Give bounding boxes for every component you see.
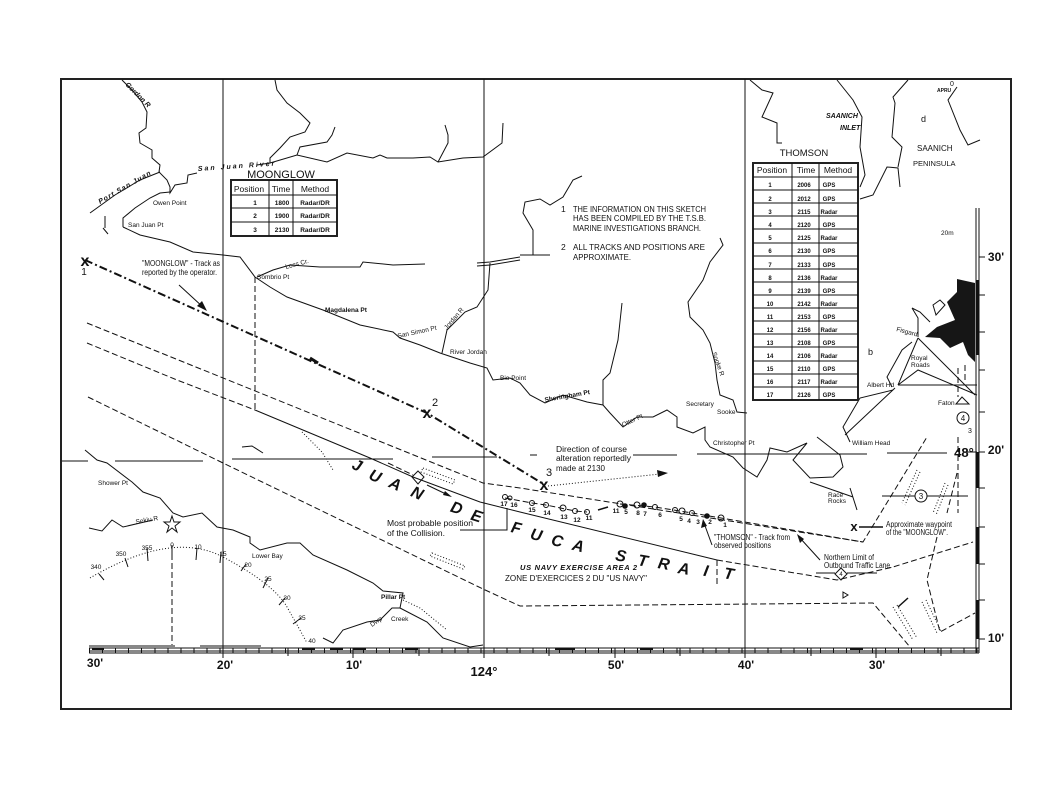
table: MOONGLOW: Position bbox=[234, 184, 264, 194]
waypoint 3 and inbound lanes bbox=[843, 470, 968, 640]
place names: William Head bbox=[852, 440, 891, 447]
track: THOMSON observed positions: 17 bbox=[500, 501, 508, 508]
longitude labels: 10' bbox=[346, 658, 362, 672]
table: THOMSON: GPS bbox=[823, 183, 835, 189]
place names: Pillar Pt bbox=[381, 594, 406, 601]
table: THOMSON: 2117 bbox=[797, 380, 811, 386]
place names: Lower Bay bbox=[252, 553, 283, 560]
table: THOMSON: GPS bbox=[823, 249, 835, 255]
table: THOMSON: Radar bbox=[820, 210, 838, 216]
exercise area label: US NAVY EXERCISE AREA 2 bbox=[520, 563, 638, 572]
strait name: U bbox=[366, 467, 384, 487]
table: MOONGLOW bbox=[231, 169, 337, 236]
table: THOMSON: 2012 bbox=[797, 197, 811, 203]
place names: Dwp bbox=[369, 615, 384, 629]
table: THOMSON: 9 bbox=[768, 289, 772, 295]
strait name: A bbox=[385, 474, 404, 495]
strait name: F bbox=[509, 519, 524, 538]
table: THOMSON: Radar bbox=[820, 276, 838, 282]
place names: River Jordan bbox=[450, 349, 487, 356]
place names: Sooke R bbox=[710, 351, 725, 377]
place names: Otter Pt bbox=[621, 413, 644, 429]
strait name: S bbox=[614, 547, 628, 566]
table: MOONGLOW: Method bbox=[301, 184, 329, 194]
coastline: Vancouver Island bbox=[90, 80, 980, 510]
lane marker 4: 4 bbox=[839, 572, 843, 578]
table: THOMSON: 1 bbox=[768, 183, 772, 189]
compass rose: 15 bbox=[219, 551, 227, 558]
callout: course alteration bbox=[548, 445, 668, 486]
notes block: MARINE INVESTIGATIONS BRANCH. bbox=[573, 223, 701, 233]
table: THOMSON: 13 bbox=[767, 341, 774, 347]
notes block: 1 bbox=[561, 204, 566, 214]
strait name: A bbox=[569, 537, 586, 556]
callout: THOMSON track bbox=[701, 519, 790, 550]
waypoint 3 and inbound lanes: 3 bbox=[919, 492, 924, 501]
table: THOMSON: Time bbox=[797, 165, 816, 175]
place names: San Juan Pt bbox=[128, 222, 164, 229]
exercise area label bbox=[505, 563, 647, 583]
callout: MOONGLOW waypoint: of the "MOONGLOW". bbox=[886, 528, 948, 537]
table: MOONGLOW: MOONGLOW bbox=[247, 169, 316, 181]
callout: MOONGLOW waypoint: x bbox=[850, 519, 858, 534]
table: THOMSON: 5 bbox=[768, 236, 772, 242]
compass rose: 30 bbox=[283, 595, 291, 602]
compass rose: 35 bbox=[298, 615, 306, 622]
callout: MOONGLOW track: reported by the operator. bbox=[142, 268, 217, 277]
table: MOONGLOW: 2130 bbox=[275, 227, 290, 234]
table: MOONGLOW: Radar/DR bbox=[300, 213, 330, 220]
table: MOONGLOW: 3 bbox=[253, 227, 257, 234]
place names: Sekiu R bbox=[135, 515, 159, 526]
table: THOMSON: GPS bbox=[823, 263, 835, 269]
table: THOMSON: Radar bbox=[820, 236, 838, 242]
longitude labels: 20' bbox=[217, 658, 233, 672]
table: THOMSON: 10 bbox=[767, 302, 774, 308]
latitude labels: 48° bbox=[954, 445, 974, 460]
land mass: dark urban area bbox=[925, 279, 975, 362]
latitude labels bbox=[954, 250, 1004, 645]
waypoint 4: 4 bbox=[961, 414, 966, 423]
place names: Race bbox=[828, 492, 844, 499]
longitude labels bbox=[87, 656, 885, 679]
track: THOMSON observed positions bbox=[500, 494, 863, 542]
track: THOMSON observed positions: 3 bbox=[696, 519, 700, 526]
longitude labels: 30' bbox=[869, 658, 885, 672]
table: THOMSON bbox=[753, 148, 858, 400]
callout: outbound traffic lane limit: Outbound Traffic Lane. bbox=[824, 561, 892, 570]
track: THOMSON observed positions: 6 bbox=[658, 512, 662, 519]
table: THOMSON: 7 bbox=[768, 263, 772, 269]
track: THOMSON observed positions: 11 bbox=[613, 508, 620, 515]
collision symbol and ship tracks bbox=[388, 463, 465, 569]
strait name: J bbox=[349, 456, 365, 476]
callout: collision position bbox=[387, 508, 507, 538]
compass rose: 350 bbox=[116, 551, 127, 558]
table: MOONGLOW: 1800 bbox=[275, 200, 290, 207]
table: THOMSON: 2156 bbox=[797, 328, 811, 334]
waypoint 4 bbox=[956, 397, 972, 435]
strait name: R bbox=[657, 555, 671, 574]
table: THOMSON: 2120 bbox=[797, 223, 811, 229]
place names: Shower Pt bbox=[98, 480, 128, 487]
strait name: I bbox=[702, 563, 710, 580]
place names: b bbox=[868, 347, 873, 357]
track: THOMSON observed positions: 11 bbox=[586, 515, 593, 522]
marker: position 2: 2 bbox=[432, 397, 438, 409]
strait name: U bbox=[528, 526, 544, 545]
table: THOMSON: 11 bbox=[767, 315, 774, 321]
track: THOMSON observed positions: 4 bbox=[687, 518, 691, 525]
notes block: HAS BEEN COMPILED BY THE T.S.B. bbox=[573, 213, 706, 223]
place names: Port San Juan bbox=[98, 170, 153, 206]
table: THOMSON: GPS bbox=[823, 341, 835, 347]
place names: Sombrio Pt bbox=[257, 274, 289, 281]
place names: Faton bbox=[938, 400, 955, 407]
place names: Roads bbox=[911, 362, 931, 369]
table: THOMSON: 3 bbox=[768, 210, 772, 216]
strait name: T bbox=[722, 565, 736, 584]
table: THOMSON: 2153 bbox=[797, 315, 811, 321]
table: THOMSON: GPS bbox=[823, 223, 835, 229]
longitude labels: 50' bbox=[608, 658, 624, 672]
waypoint 4: 3 bbox=[968, 428, 972, 435]
table: THOMSON: 14 bbox=[767, 354, 774, 360]
table: MOONGLOW: 1 bbox=[253, 200, 257, 207]
place names: Sooke bbox=[717, 409, 736, 416]
longitude labels: 40' bbox=[738, 658, 754, 672]
place names: Bio Point bbox=[500, 375, 526, 382]
north arrow bbox=[103, 216, 108, 234]
strait name: N bbox=[408, 484, 426, 504]
place names: Albert Hd bbox=[867, 382, 894, 389]
table: THOMSON: 2142 bbox=[797, 302, 811, 308]
table: THOMSON: 2139 bbox=[797, 289, 811, 295]
place names: 0 bbox=[950, 81, 954, 88]
table: THOMSON: 2108 bbox=[797, 341, 811, 347]
place names: Gordon R bbox=[124, 81, 151, 109]
table: THOMSON: Radar bbox=[820, 380, 838, 386]
table: THOMSON: 2126 bbox=[797, 393, 811, 399]
table: THOMSON: Radar bbox=[820, 354, 838, 360]
table: THOMSON: 2115 bbox=[797, 210, 811, 216]
callout: course alteration: Direction of course bbox=[556, 445, 628, 454]
table: MOONGLOW: 2 bbox=[253, 213, 257, 220]
callout: MOONGLOW track bbox=[142, 259, 220, 311]
place names: Jordan R bbox=[443, 306, 466, 331]
strait name bbox=[349, 456, 736, 584]
track: THOMSON observed positions: 5 bbox=[624, 509, 628, 516]
place names: Magdalena Pt bbox=[325, 307, 368, 314]
strait name: A bbox=[676, 560, 691, 579]
place names: Fisgard bbox=[895, 326, 919, 339]
track: THOMSON observed positions: 1 bbox=[723, 522, 727, 529]
compass rose: 20 bbox=[244, 562, 252, 569]
longitude labels: 30' bbox=[87, 656, 103, 670]
compass rose bbox=[90, 516, 316, 645]
table: THOMSON: GPS bbox=[823, 315, 835, 321]
notes block bbox=[561, 204, 706, 262]
compass rose: 25 bbox=[264, 576, 272, 583]
place names: INLET bbox=[840, 125, 861, 132]
exercise area label: ZONE D'EXERCICES 2 DU "US NAVY" bbox=[505, 574, 647, 583]
table: THOMSON: 2130 bbox=[797, 249, 811, 255]
latitude labels: 20' bbox=[988, 443, 1004, 457]
table: THOMSON: GPS bbox=[823, 367, 835, 373]
place names: Secretary bbox=[686, 401, 715, 408]
table: THOMSON: 2133 bbox=[797, 263, 811, 269]
table: THOMSON: GPS bbox=[823, 197, 835, 203]
table: THOMSON: 15 bbox=[767, 367, 774, 373]
place names: PENINSULA bbox=[913, 159, 956, 168]
table: THOMSON: 12 bbox=[767, 328, 774, 334]
latitude labels: 10' bbox=[988, 631, 1004, 645]
table: THOMSON: 16 bbox=[767, 380, 774, 386]
table: MOONGLOW: Radar/DR bbox=[300, 200, 330, 207]
bottom longitude scale bbox=[89, 646, 979, 658]
callout: outbound traffic lane limit: Northern Limit of bbox=[824, 553, 875, 562]
track: THOMSON observed positions: 5 bbox=[679, 516, 683, 523]
table: THOMSON: Position bbox=[757, 165, 787, 175]
place names: Owen Point bbox=[153, 200, 187, 207]
track: THOMSON observed positions: 15 bbox=[528, 507, 536, 514]
notes block: 2 bbox=[561, 242, 566, 252]
compass rose: 10 bbox=[194, 544, 202, 551]
table: THOMSON: Radar bbox=[820, 302, 838, 308]
place names: San Juan River bbox=[198, 161, 277, 173]
table: THOMSON: 4 bbox=[768, 223, 772, 229]
table: THOMSON: Method bbox=[824, 165, 852, 175]
marker: position 3: x bbox=[540, 477, 549, 494]
callout: outbound traffic lane limit bbox=[797, 534, 892, 570]
map frame bbox=[61, 79, 1011, 709]
compass rose: 40 bbox=[308, 638, 316, 645]
callout: collision position: Most probable position bbox=[387, 519, 473, 528]
strait name: T bbox=[636, 552, 650, 571]
place names: Creek bbox=[391, 616, 409, 623]
marker: position 2 bbox=[423, 397, 438, 422]
track: THOMSON observed positions: 16 bbox=[510, 502, 518, 509]
right latitude scale bbox=[976, 208, 985, 653]
place names: APRU bbox=[937, 88, 952, 94]
callout: THOMSON track: observed positions bbox=[714, 541, 771, 550]
place names: SAANICH bbox=[826, 113, 859, 120]
coastline: Olympic Peninsula bbox=[85, 432, 483, 647]
meridians and parallel bbox=[62, 79, 977, 650]
table: THOMSON: 17 bbox=[767, 393, 774, 399]
marker: position 1: x bbox=[81, 253, 90, 270]
track: THOMSON observed positions: 12 bbox=[573, 517, 581, 524]
traffic lane boundaries bbox=[87, 277, 975, 647]
table: THOMSON: 6 bbox=[768, 249, 772, 255]
track: THOMSON observed positions: 7 bbox=[643, 511, 647, 518]
notes block: APPROXIMATE. bbox=[573, 252, 631, 262]
compass rose: 340 bbox=[91, 564, 102, 571]
strait name: C bbox=[549, 532, 565, 551]
place names: 20m bbox=[941, 230, 954, 237]
compass rose: 0 bbox=[170, 542, 174, 549]
table: THOMSON: 2 bbox=[768, 197, 772, 203]
place names: SAANICH bbox=[917, 144, 953, 153]
place names bbox=[98, 81, 956, 629]
place names: Sheringham Pt bbox=[544, 389, 591, 404]
table: THOMSON: GPS bbox=[823, 289, 835, 295]
track: MOONGLOW bbox=[81, 253, 552, 494]
table: MOONGLOW: 1900 bbox=[275, 213, 290, 220]
table: THOMSON: 2106 bbox=[797, 354, 811, 360]
strait name: E bbox=[469, 507, 485, 527]
callout: THOMSON track: "THOMSON" - Track from bbox=[714, 533, 790, 542]
strait name: D bbox=[448, 499, 465, 519]
table: THOMSON: 2110 bbox=[797, 367, 811, 373]
callout: course alteration: alteration reportedly bbox=[556, 454, 631, 463]
place names: Christopher Pt bbox=[713, 440, 755, 447]
marker: position 2: x bbox=[423, 405, 432, 422]
notes block: ALL TRACKS AND POSITIONS ARE bbox=[573, 242, 705, 252]
table: THOMSON: Radar bbox=[820, 328, 838, 334]
track: THOMSON observed positions: 14 bbox=[543, 510, 551, 517]
table: THOMSON: 8 bbox=[768, 276, 772, 282]
place names: d bbox=[921, 114, 926, 124]
marker: position 3 bbox=[540, 467, 552, 494]
harbour approach lines bbox=[845, 338, 977, 435]
table: MOONGLOW: Radar/DR bbox=[300, 227, 330, 234]
place names: San Simon Pt bbox=[397, 325, 437, 340]
callout: MOONGLOW track: "MOONGLOW" - Track as bbox=[142, 259, 220, 268]
compass rose: 355 bbox=[142, 545, 153, 552]
latitude labels: 30' bbox=[988, 250, 1004, 264]
lane marker 4 bbox=[816, 568, 877, 580]
track: THOMSON observed positions: 2 bbox=[708, 519, 712, 526]
marker: position 1 bbox=[81, 253, 90, 278]
table: THOMSON: GPS bbox=[823, 393, 835, 399]
marker: position 3: 3 bbox=[546, 467, 552, 479]
marker: position 1: 1 bbox=[81, 267, 87, 278]
notes block: THE INFORMATION ON THIS SKETCH bbox=[573, 204, 706, 214]
place names: Rocks bbox=[828, 498, 847, 505]
table: THOMSON: 2125 bbox=[797, 236, 811, 242]
callout: MOONGLOW waypoint: Approximate waypoint bbox=[886, 520, 953, 529]
table: THOMSON: THOMSON bbox=[780, 148, 828, 159]
track: THOMSON observed positions: 13 bbox=[560, 514, 568, 521]
place names: Royal bbox=[911, 355, 928, 362]
place names: Loss Cr. bbox=[285, 258, 310, 271]
table: THOMSON: 2006 bbox=[797, 183, 811, 189]
callout: course alteration: made at 2130 bbox=[556, 464, 606, 473]
callout: collision position: of the Collision. bbox=[387, 529, 445, 538]
callout: MOONGLOW waypoint bbox=[850, 519, 953, 537]
track: THOMSON observed positions: 8 bbox=[636, 510, 640, 517]
longitude labels: 124° bbox=[471, 664, 497, 679]
table: MOONGLOW: Time bbox=[272, 184, 291, 194]
table: THOMSON: 2136 bbox=[797, 276, 811, 282]
